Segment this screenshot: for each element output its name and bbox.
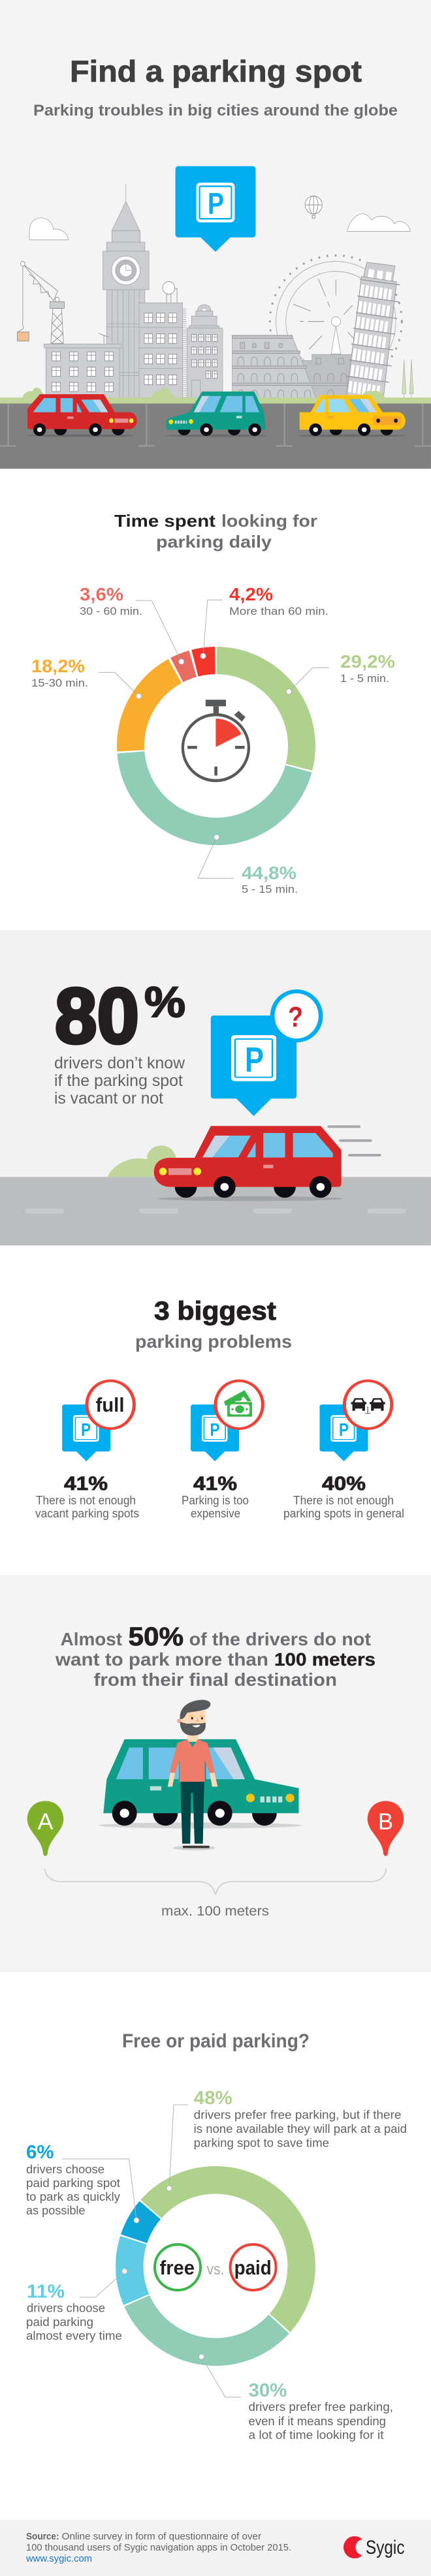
Big Ben tower — [103, 184, 149, 398]
parking bay lines — [0, 403, 431, 446]
chart leader lines and dots — [62, 2105, 242, 2397]
label: 29,2%: 1 - 5 min. — [340, 672, 389, 685]
label: 11%: paid parking — [26, 2316, 93, 2329]
label: 30%: a lot of time looking for it — [248, 2429, 384, 2442]
problem badges — [87, 1381, 392, 1429]
problem stat: 40% general: parking spots in general — [283, 1507, 404, 1520]
P letters on problem pins: P — [81, 1420, 91, 1440]
heading: almost 50 percent — [55, 1622, 375, 1690]
label: 4,2%: 4,2% — [229, 584, 273, 604]
source note: www.sygic.com — [25, 2553, 92, 2564]
Leaning Tower of Pisa — [346, 262, 400, 398]
label: 3,6%: 3,6% — [80, 584, 123, 604]
subtitle: Parking troubles in big cities around the globe — [33, 102, 398, 119]
problem stat: 41% vacant: There is not enough — [36, 1494, 136, 1507]
label: 6%: drivers choose — [26, 2163, 104, 2176]
P letters on problem pins — [81, 1420, 349, 1440]
icon: pin three — [320, 1404, 368, 1461]
building: domed block — [187, 305, 223, 398]
problem stat: 40% general — [283, 1473, 404, 1520]
yellow parked car — [297, 395, 406, 437]
heading: 3 biggest parking problems — [135, 1297, 292, 1352]
panel: white time section background — [0, 469, 431, 930]
icon: pin B — [368, 1801, 404, 1856]
badges: free vs paid: free — [159, 2256, 195, 2279]
text: drivers don't know — [54, 1054, 185, 1108]
problem stat: 41% expensive — [182, 1473, 249, 1520]
text: drivers don't know: drivers don’t know — [54, 1054, 185, 1072]
green car — [99, 1739, 301, 1829]
problem stat: 40% general: There is not enough — [293, 1494, 394, 1507]
label: 4,2% — [229, 584, 328, 617]
label: 48%: 48% — [194, 2088, 232, 2109]
icon: P letter and question mark — [245, 1001, 303, 1079]
icon: left cloud — [29, 218, 68, 240]
text: drivers don't know: is vacant or not — [54, 1089, 163, 1108]
title: Find a parking spot — [70, 54, 362, 88]
heading: almost 50 percent: Almost — [61, 1629, 122, 1649]
label: 18,2% — [31, 656, 88, 689]
label: 44,8% — [242, 863, 298, 895]
panel: white problems section background — [0, 1245, 431, 1575]
stat: 80% — [55, 972, 185, 1060]
heading: time spent: Time spent — [114, 511, 216, 531]
London Eye wheel — [270, 255, 402, 388]
label: 44,8%: 5 - 15 min. — [242, 883, 298, 895]
icon: parking pin with question bubble — [211, 989, 323, 1116]
icon: P letter and question mark: P — [245, 1040, 264, 1079]
problem stat: 41% expensive: expensive — [191, 1507, 240, 1520]
label: 6%: as possible — [26, 2204, 85, 2217]
P letters on problem pins: P — [210, 1420, 219, 1440]
problem stat: 41% vacant — [35, 1473, 139, 1520]
red car driving — [154, 1126, 343, 1201]
heading: time spent — [114, 511, 317, 551]
label: 48%: parking spot to save time — [194, 2136, 329, 2149]
heading: 3 biggest parking problems: 3 biggest — [154, 1297, 276, 1326]
road: 80 percent section — [0, 989, 431, 1245]
label: 11%: drivers choose — [27, 2302, 105, 2315]
bushes — [23, 388, 385, 398]
problem stat: 41% vacant: vacant parking spots — [35, 1507, 139, 1520]
crane — [18, 262, 64, 343]
city skyline illustration — [0, 166, 431, 469]
label: 48%: drivers prefer free parking, but if there — [194, 2109, 401, 2122]
label: 18,2%: 15-30 min. — [31, 677, 88, 689]
label: 18,2%: 18,2% — [31, 656, 85, 676]
grass strip — [0, 397, 431, 404]
logo: Sygic: Sygic — [366, 2537, 405, 2558]
problem stat: 41% expensive: 41% — [193, 1473, 237, 1495]
red parked car — [26, 394, 137, 437]
icon: P letter on header pin: P — [208, 187, 224, 221]
building: rear fortress — [302, 354, 352, 398]
label: 3,6%: 30 - 60 min. — [80, 605, 142, 617]
label: 11%: 11% — [27, 2282, 65, 2303]
heading: almost 50 percent: of the drivers do not — [189, 1629, 371, 1649]
stat: 80%: 80 — [55, 972, 139, 1060]
heading: almost 50 percent: 100 meters — [274, 1649, 375, 1669]
building: middle block with water tower — [139, 281, 184, 398]
brace — [45, 1869, 386, 1895]
icon: right cloud — [347, 214, 410, 232]
source note: Online survey in form of questionnaire of over — [62, 2531, 261, 2542]
road — [0, 403, 431, 469]
icon: hot air balloon — [305, 196, 322, 218]
panel: header background — [0, 0, 431, 469]
problem stat: 41% expensive: Parking is too — [182, 1494, 249, 1507]
label: 48% — [194, 2088, 407, 2149]
label: 6%: paid parking spot — [26, 2177, 120, 2190]
icon: stopwatch — [183, 700, 249, 781]
problem pins — [62, 1404, 368, 1461]
icon: pin A — [27, 1801, 63, 1856]
source note: 100 thousand users of Sygic navigation apps in October 2015. — [26, 2542, 291, 2553]
text: drivers don't know: if the parking spot — [54, 1072, 183, 1090]
source note — [25, 2531, 291, 2564]
speed lines — [329, 1126, 379, 1155]
heading: 3 biggest parking problems: parking problems — [135, 1331, 292, 1352]
label: 29,2% — [340, 651, 395, 685]
building: left block with windows — [44, 334, 121, 398]
label: 29,2%: 29,2% — [340, 651, 395, 672]
label: 11% — [26, 2282, 122, 2342]
heading: almost 50 percent: 50% — [128, 1622, 184, 1651]
logo: Sygic — [343, 2536, 405, 2558]
problem stat: 41% vacant: 41% — [64, 1473, 108, 1495]
bush — [108, 1145, 177, 1177]
illustration: car, man, pins and brace — [27, 1699, 404, 1895]
man with beard — [168, 1699, 217, 1850]
label: 30%: even if it means spending — [248, 2415, 386, 2428]
pin letters: A — [38, 1809, 54, 1835]
pin letters: B — [378, 1809, 393, 1835]
word in full badge: full — [95, 1393, 124, 1416]
icon: two cars badge — [344, 1381, 392, 1429]
label: 48%: is none available they will park at a paid — [194, 2122, 407, 2135]
label: 6%: 6% — [26, 2142, 54, 2163]
source note: Source: — [26, 2531, 59, 2542]
heading: time spent: parking daily — [156, 532, 272, 551]
Colosseum — [232, 335, 347, 398]
heading: time spent: looking for — [221, 511, 317, 531]
heading: free or paid: Free or paid parking? — [122, 2030, 310, 2052]
badges: free vs paid: paid — [234, 2256, 272, 2279]
panel: 80 percent section background — [0, 930, 431, 1177]
icon: pin one — [62, 1404, 110, 1461]
heading: almost 50 percent: from their final destination — [94, 1669, 337, 1690]
donut chart: time spent — [131, 660, 302, 831]
icon: pin two — [191, 1404, 239, 1461]
icon: blue parking pin — [176, 166, 255, 252]
icon: full badge circle — [87, 1381, 134, 1429]
label: 30% — [248, 2380, 393, 2442]
panel: footer background — [0, 2520, 431, 2576]
icon: P letter and question mark: ? — [288, 1001, 303, 1033]
label: 30%: 30% — [248, 2380, 287, 2401]
label: 3,6% — [80, 584, 142, 617]
label: 11%: almost every time — [26, 2329, 122, 2342]
label: 6% — [26, 2142, 120, 2217]
trees — [402, 360, 413, 398]
panel: 50 percent section background — [0, 1575, 431, 1972]
badges: free vs paid — [155, 2244, 276, 2290]
icon: money badge — [216, 1381, 263, 1429]
label: 44,8%: 44,8% — [242, 863, 296, 883]
P letters on problem pins: P — [339, 1420, 349, 1440]
label: 4,2%: More than 60 min. — [229, 605, 328, 617]
label: 30%: drivers prefer free parking, — [248, 2400, 393, 2413]
donut chart: free or paid — [129, 2180, 302, 2352]
pin letters — [38, 1809, 393, 1835]
badges: free vs paid: vs. — [206, 2261, 225, 2278]
problem stat: 40% general: 40% — [322, 1473, 366, 1495]
label: max 100 meters: max. 100 meters — [161, 1904, 269, 1919]
green parked car — [165, 392, 267, 437]
stat: 80%: % — [144, 978, 185, 1026]
heading: almost 50 percent: want to park more than — [55, 1649, 268, 1669]
label: 6%: to park as quickly — [26, 2190, 120, 2203]
lane dashes — [25, 1209, 406, 1213]
chart leader lines and dots — [99, 600, 329, 878]
road surface — [0, 1177, 431, 1245]
